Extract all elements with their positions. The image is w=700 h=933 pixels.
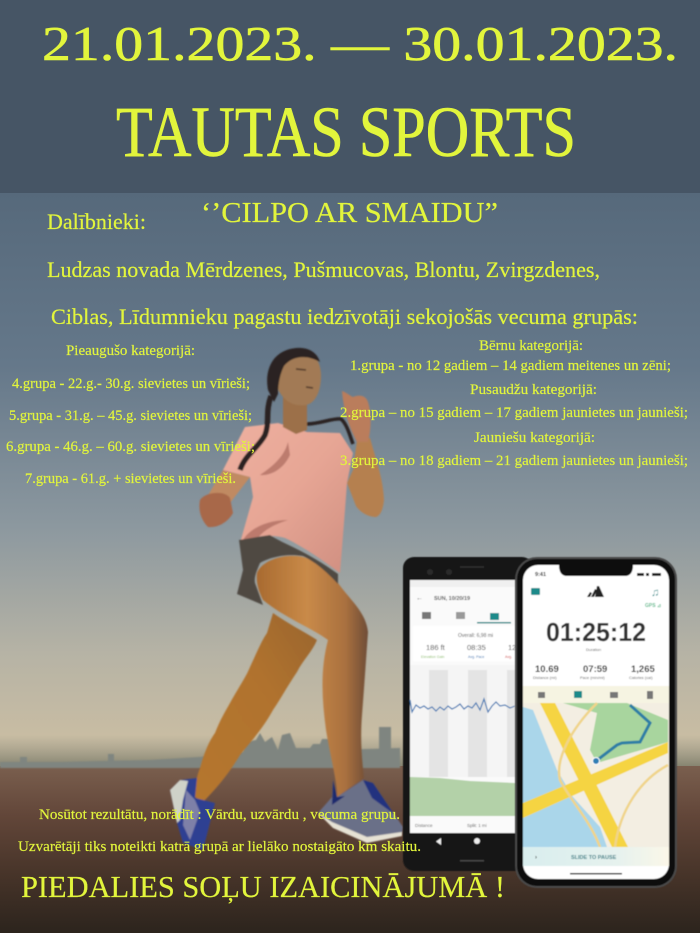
bottom selectors: Split: 1 mi bbox=[467, 823, 487, 828]
back arrow: ← bbox=[416, 595, 423, 602]
youth category list: Jauniešu kategorijā: bbox=[474, 430, 595, 446]
nav buttons bbox=[436, 838, 484, 862]
highway diagonal bbox=[540, 703, 628, 847]
stats: 186 ft bbox=[426, 643, 446, 652]
front shoe tongue bbox=[363, 780, 394, 814]
back phone date: SUN, 10/20/19 bbox=[434, 596, 470, 602]
secondary roads bbox=[559, 703, 668, 847]
neck bbox=[283, 396, 307, 434]
youth category list: 3.grupa – no 18 gadiem – 21 gadiem jaunietes un jaunieši; bbox=[340, 453, 688, 469]
right hand bbox=[342, 391, 371, 442]
park bbox=[563, 703, 668, 763]
map base bbox=[523, 703, 669, 847]
gps label: GPS ⊿ bbox=[645, 603, 661, 609]
stat captions: Calories (cal) bbox=[629, 675, 653, 680]
shirt bbox=[223, 423, 353, 573]
participants text: Ludzas novada Mērdzenes, Pušmucovas, Blontu, Zvirgzdenes, bbox=[47, 257, 600, 282]
submission instructions: Nosūtot rezultātu, norādīt : Vārdu, uzvārdu , vecuma grupu. bbox=[39, 807, 400, 823]
right arm bbox=[347, 438, 384, 517]
tab underline bbox=[477, 622, 511, 624]
stat labels bbox=[421, 655, 512, 659]
back shoe bbox=[170, 778, 215, 850]
youth category list: 2.grupa – no 15 gadiem – 17 gadiem jaunietes un jaunieši; bbox=[340, 405, 688, 421]
adidas logo bbox=[587, 586, 604, 597]
runner photo bbox=[170, 348, 403, 850]
stat captions: Pace (min/mi) bbox=[580, 675, 605, 680]
stats bbox=[426, 643, 516, 652]
pace line bbox=[410, 699, 515, 712]
youth category list: 1.grupa - no 12 gadiem – 14 gadiem meitenes un zēni; bbox=[350, 358, 671, 374]
youth category list: Bērnu kategorijā: bbox=[479, 338, 583, 354]
highway main bbox=[523, 742, 668, 818]
background photo: sky and ground bbox=[0, 193, 700, 933]
front phone inner bezel bbox=[517, 559, 675, 886]
front shoe bbox=[318, 780, 403, 842]
stats: 08:35 bbox=[467, 643, 486, 652]
back phone camera and speaker bbox=[427, 566, 484, 575]
slide to pause bar bbox=[523, 847, 669, 866]
participants text bbox=[47, 257, 638, 329]
notch bbox=[559, 565, 633, 576]
stats row bbox=[535, 664, 655, 675]
front phone body bbox=[515, 557, 677, 888]
chart panel bbox=[410, 665, 520, 777]
slide arrow: › bbox=[535, 855, 537, 861]
left braid bbox=[240, 396, 271, 470]
adult category list: 4.grupa - 22.g.- 30.g. sievietes un vīrieši; bbox=[12, 376, 250, 392]
participants text: Ciblas, Līdumnieku pagastu iedzīvotāji sekojošās vecuma grupās: bbox=[51, 304, 638, 329]
adult category list: Pieaugušo kategorijā: bbox=[66, 343, 195, 359]
stat labels: Avg. bbox=[505, 655, 512, 659]
camera icon bbox=[531, 588, 540, 595]
back shoe heel bbox=[170, 780, 188, 823]
tab icons bbox=[422, 612, 499, 620]
stat captions: Distance (mi) bbox=[533, 675, 557, 680]
tab bar bbox=[523, 686, 669, 703]
music icon: ♫ bbox=[651, 587, 659, 599]
back phone body bbox=[403, 557, 533, 871]
adult category list: 7.grupa - 61.g. + sievietes un vīrieši. bbox=[25, 471, 236, 487]
shorts bbox=[237, 535, 338, 605]
eye and mouth shadow bbox=[296, 369, 313, 388]
face bbox=[276, 352, 321, 405]
stat labels: Elevation Gain bbox=[421, 655, 444, 659]
back leg bbox=[195, 613, 317, 802]
youth category list: Pusaudžu kategorijā: bbox=[470, 382, 597, 398]
status time: 9:41 bbox=[535, 572, 546, 578]
phone: back android with run chart bbox=[403, 557, 533, 871]
adult category list: 6.grupa - 46.g. – 60.g. sievietes un vīrieši; bbox=[6, 439, 255, 455]
chart columns bbox=[429, 670, 520, 777]
duration label: Duration bbox=[586, 647, 601, 652]
stats: 12 bbox=[508, 643, 516, 652]
call to action: PIEDALIES SOĻU IZAICINĀJUMĀ ! bbox=[21, 869, 505, 904]
phone: front iphone with map bbox=[515, 557, 677, 888]
submission instructions: Uzvarētāji tiks noteikti katrā grupā ar lielāko nostaigāto km skaitu. bbox=[18, 839, 421, 855]
participants label: Dalībnieki: bbox=[47, 209, 146, 234]
shirt shadows bbox=[243, 442, 290, 540]
stats row: 10.69 bbox=[535, 664, 559, 675]
adult category list: 5.grupa - 31.g. – 45.g. sievietes un vīrieši; bbox=[9, 408, 252, 424]
date heading: 21.01.2023. — 30.01.2023. bbox=[42, 16, 678, 71]
front shoe sole bbox=[318, 813, 402, 843]
main title: TAUTAS SPORTS bbox=[116, 92, 576, 172]
city skyline on horizon bbox=[0, 727, 400, 768]
hair bbox=[267, 348, 320, 402]
timer: 01:25:12 bbox=[546, 617, 646, 647]
youth category list bbox=[340, 338, 688, 469]
water bbox=[523, 707, 607, 847]
front phone screen bbox=[523, 565, 669, 879]
stat captions bbox=[533, 675, 653, 680]
back phone screen bbox=[410, 580, 520, 833]
bottom selectors: Distance bbox=[415, 823, 433, 828]
stats row: 07:59 bbox=[583, 664, 607, 675]
back phone status bar bbox=[410, 580, 520, 587]
top header band bbox=[0, 0, 700, 193]
right braid bbox=[307, 419, 353, 444]
front shoe heel counter bbox=[332, 780, 345, 805]
stats row: 1,265 bbox=[631, 664, 655, 675]
left hand bbox=[199, 493, 233, 527]
bottom selectors bbox=[415, 823, 487, 828]
adult category list bbox=[6, 343, 255, 487]
back shoe mesh bbox=[183, 790, 200, 840]
front leg bbox=[257, 556, 368, 797]
overall: Overall: 6,98 mi bbox=[458, 633, 493, 639]
slide label: SLIDE TO PAUSE bbox=[571, 855, 617, 861]
back phone data strip bbox=[413, 626, 521, 661]
status icons bbox=[637, 573, 661, 576]
stat labels: Avg. Pace bbox=[468, 655, 484, 659]
submission instructions bbox=[18, 807, 421, 855]
home indicator bbox=[570, 873, 622, 874]
route line bbox=[596, 705, 650, 761]
route start dot bbox=[592, 758, 600, 764]
left forearm bbox=[207, 470, 250, 503]
elevation area bbox=[410, 777, 520, 816]
tab icons bbox=[538, 691, 653, 699]
subtitle: ‘’CILPO AR SMAIDU” bbox=[201, 197, 498, 229]
